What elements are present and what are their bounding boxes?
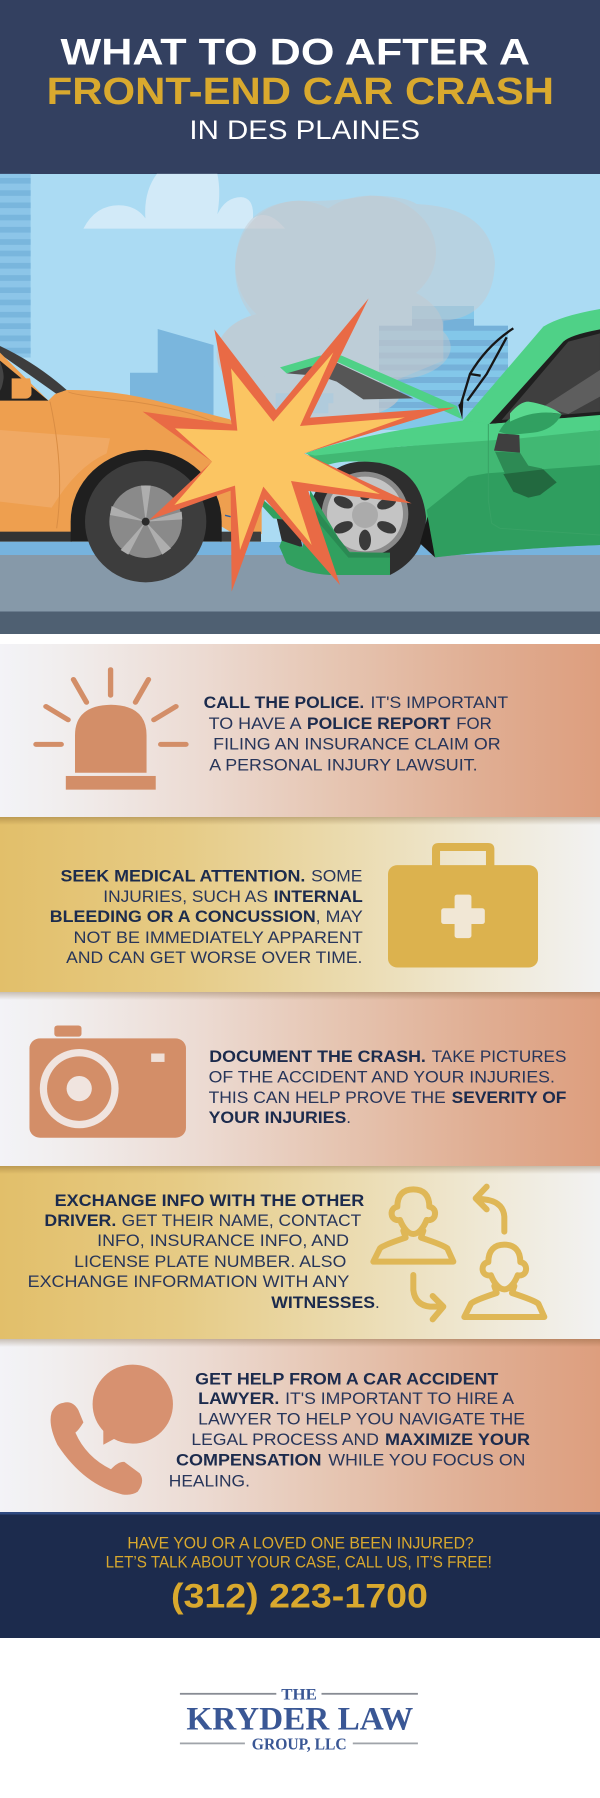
- document text: TAKE PICTURES: [432, 1047, 566, 1066]
- orange car: [0, 346, 262, 582]
- body: [307, 430, 600, 557]
- lawyer text: [169, 1370, 530, 1490]
- phone number: (312) 223-1700: [171, 1578, 428, 1616]
- exchange text: EXCHANGE INFO WITH THE OTHER: [55, 1191, 364, 1210]
- medical text: , MAY: [316, 907, 363, 926]
- panel: call the police: [0, 644, 600, 817]
- document text: YOUR INJURIES: [209, 1108, 346, 1127]
- logo: The Kryder Law Group: GROUP, LLC: [252, 1734, 347, 1754]
- exchange text: [28, 1191, 380, 1312]
- lawyer text: LEGAL PROCESS AND: [191, 1430, 379, 1449]
- exchange text: .: [375, 1293, 380, 1312]
- person two: [464, 1245, 544, 1317]
- panel: seek medical attention: [0, 817, 600, 992]
- arrow up-left: [476, 1187, 504, 1232]
- exchange text: EXCHANGE INFORMATION WITH ANY: [28, 1272, 349, 1291]
- medical text: SEEK MEDICAL ATTENTION.: [60, 867, 305, 886]
- police text: IT'S IMPORTANT: [370, 693, 508, 712]
- crumpled hood: [280, 356, 462, 419]
- call to action text line 2: LET’S TALK ABOUT YOUR CASE, CALL US, IT’S FREE!: [106, 1554, 492, 1572]
- police text: CALL THE POLICE.: [204, 693, 364, 712]
- document text: DOCUMENT THE CRASH.: [209, 1047, 426, 1066]
- exchange text: INFO, INSURANCE INFO, AND: [97, 1231, 349, 1250]
- icon: phone with speech bubble: [51, 1365, 173, 1495]
- road: [0, 542, 600, 634]
- panel: document the crash: [0, 992, 600, 1166]
- medical text: INTERNAL: [274, 887, 363, 906]
- police text: FOR: [456, 714, 492, 733]
- call to action text: HAVE YOU OR A LOVED ONE BEEN INJURED?: [127, 1534, 474, 1552]
- panel: call to action: [0, 1512, 600, 1638]
- icon: camera: [29, 1025, 186, 1138]
- lawyer text: LAWYER TO HELP YOU NAVIGATE THE: [198, 1409, 525, 1428]
- document text: OF THE ACCIDENT AND YOUR INJURIES.: [209, 1067, 555, 1086]
- exchange text: GET THEIR NAME, CONTACT: [122, 1211, 361, 1230]
- lawyer text: LAWYER.: [198, 1389, 279, 1408]
- police text: [204, 693, 508, 774]
- medical text: AND CAN GET WORSE OVER TIME.: [66, 948, 362, 967]
- person one: [373, 1189, 453, 1262]
- medical text: NOT BE IMMEDIATELY APPARENT: [74, 928, 363, 947]
- lawyer text: HEALING.: [169, 1471, 250, 1490]
- cloud: [83, 174, 285, 229]
- roof and windshield: [463, 309, 600, 430]
- panel: get help from a lawyer: [0, 1339, 600, 1512]
- side mirror and shading: [499, 410, 562, 435]
- lawyer text: MAXIMIZE YOUR: [385, 1430, 530, 1449]
- exchange text: DRIVER.: [44, 1211, 116, 1230]
- document text: [209, 1047, 566, 1127]
- police text: POLICE REPORT: [307, 714, 451, 733]
- skyline buildings: [130, 306, 508, 440]
- medical text: BLEEDING OR A CONCUSSION: [50, 907, 316, 926]
- icon: police siren: [36, 670, 186, 790]
- hero illustration: car crash: [0, 174, 600, 634]
- lawyer text: GET HELP FROM A CAR ACCIDENT: [195, 1370, 499, 1389]
- arrow down-right: [413, 1275, 443, 1319]
- title line 3: IN DES PLAINES: [189, 115, 420, 145]
- police text: FILING AN INSURANCE CLAIM OR: [213, 734, 501, 753]
- medical text: [50, 867, 363, 967]
- lawyer text: IT'S IMPORTANT TO HIRE A: [285, 1389, 515, 1408]
- green car: [263, 309, 600, 575]
- medical text: SOME: [311, 867, 362, 886]
- logo: The Kryder Law Group: THE: [281, 1686, 317, 1704]
- icon: first aid kit: [388, 843, 538, 968]
- logo: The Kryder Law Group: [180, 1686, 418, 1754]
- title line 1: WHAT TO DO AFTER A: [60, 32, 530, 72]
- lawyer text: WHILE YOU FOCUS ON: [328, 1450, 525, 1470]
- explosion star: [143, 298, 455, 592]
- wheel: [305, 462, 426, 575]
- wiper: [458, 328, 513, 419]
- document text: .: [346, 1108, 351, 1127]
- panel: exchange info: [0, 1166, 600, 1339]
- document text: THIS CAN HELP PROVE THE: [209, 1088, 446, 1107]
- header panel: [0, 0, 600, 174]
- police text: TO HAVE A: [209, 714, 302, 733]
- left striped building: [0, 174, 31, 358]
- police text: A PERSONAL INJURY LAWSUIT.: [209, 755, 478, 774]
- icon: two people exchanging: [373, 1187, 544, 1319]
- logo: The Kryder Law Group: KRYDER LAW: [186, 1702, 413, 1738]
- medical text: INJURIES, SUCH AS: [103, 887, 268, 906]
- title line 2: FRONT-END CAR CRASH: [47, 71, 554, 113]
- document text: SEVERITY OF: [452, 1088, 566, 1107]
- lawyer text: COMPENSATION: [176, 1450, 322, 1470]
- smoke cloud: [217, 196, 495, 421]
- exchange text: LICENSE PLATE NUMBER. ALSO: [74, 1252, 346, 1271]
- front bumper: [277, 518, 302, 547]
- exchange text: WITNESSES: [271, 1293, 375, 1312]
